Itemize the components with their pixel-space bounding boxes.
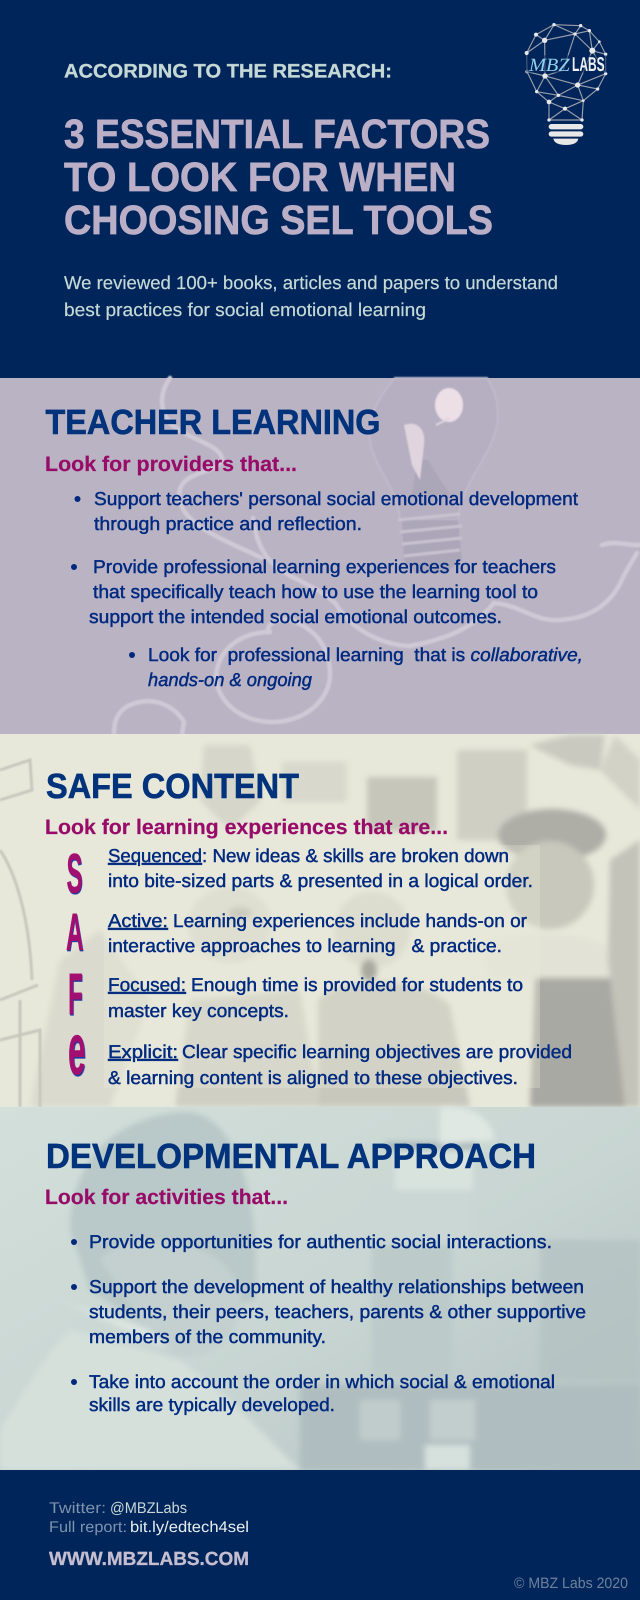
subheading: providers: Look for providers that... [45, 453, 297, 476]
icon: MBZ Labs light bulb logo [525, 23, 607, 145]
background photo: light bulb and chalk lines [0, 378, 640, 735]
acrostic letter S with sequenced text: : New ideas & skills are broken down [202, 845, 509, 866]
bullet: professional learning: support the intended social emotional outcomes. [89, 606, 502, 627]
acrostic letter A with active text: Learning experiences include hands-on or [173, 910, 527, 931]
title [64, 111, 493, 243]
acrostic letter S with sequenced text: S [66, 843, 83, 905]
bullet: professional learning [71, 556, 556, 627]
eyebrow heading: ACCORDING TO THE RESEARCH: [64, 60, 392, 82]
bullet: developmental order [71, 1371, 555, 1415]
acrostic letter A with active text [66, 903, 527, 962]
subheading: activities: Look for activities that... [45, 1186, 288, 1209]
sub-bullet: collaborative learning: Look for professional learning that is collaborative, [148, 644, 583, 665]
acrostic letter A with active text: A [66, 903, 83, 962]
copyright: © MBZ Labs 2020 [514, 1575, 628, 1592]
bullet: developmental order: skills are typically developed. [89, 1394, 335, 1415]
acrostic letter F with focused text: master key concepts. [108, 1000, 289, 1021]
acrostic letter e with explicit text [68, 1010, 572, 1090]
background photo: child stacking blocks [0, 1107, 640, 1470]
acrostic letter e with explicit text: & learning content is aligned to these objectives. [108, 1067, 518, 1088]
website: WWW.MBZLABS.COM [49, 1549, 249, 1570]
title: TO LOOK FOR WHEN [64, 154, 456, 200]
bullet: professional learning: that specifically teach how to use the learning tool to [93, 581, 538, 602]
acrostic letter e with explicit text: e [68, 1010, 86, 1091]
social links: Twitter: [49, 1500, 106, 1517]
panel: developmental approach [0, 1107, 640, 1470]
panel: safe content [0, 734, 640, 1107]
social links: bit.ly/edtech4sel [130, 1519, 249, 1536]
heading: safe content: SAFE CONTENT [46, 767, 299, 806]
acrostic letter F with focused text: Enough time is provided for students to [191, 974, 523, 995]
bullet: personal development [74, 488, 579, 534]
intro text: best practices for social emotional learning [64, 299, 426, 320]
panel: footer [0, 1470, 640, 1600]
title: 3 ESSENTIAL FACTORS [64, 111, 490, 157]
intro text [64, 272, 558, 320]
bullet: healthy relationships: members of the community. [89, 1326, 326, 1347]
acrostic letter S with sequenced text: Sequenced [108, 845, 202, 866]
icon: MBZ Labs light bulb logo: MBZ [529, 55, 570, 75]
background photo: children raising hands [0, 734, 640, 1107]
acrostic letter e with explicit text: Explicit: [108, 1041, 178, 1062]
sub-bullet: collaborative learning [129, 644, 583, 690]
bullet: healthy relationships: students, their peers, teachers, parents & other supportive [89, 1301, 586, 1322]
social links [49, 1500, 249, 1536]
bullet: professional learning: Provide professional learning experiences for teachers [93, 556, 556, 577]
bullet: social interactions: Provide opportunities for authentic social interactions. [89, 1231, 552, 1252]
acrostic letter S with sequenced text [66, 843, 533, 905]
acrostic letter A with active text: interactive approaches to learning & practice. [108, 935, 502, 956]
subheading: learning experiences: Look for learning experiences that are... [45, 816, 448, 839]
bullet: healthy relationships [71, 1276, 586, 1347]
icon: MBZ Labs light bulb logo: LABS [572, 53, 605, 75]
heading: developmental approach: DEVELOPMENTAL APPROACH [46, 1137, 536, 1176]
social links: Full report: [49, 1519, 127, 1536]
bullet: personal development: through practice and reflection. [94, 513, 362, 534]
bullet: personal development: Support teachers' personal social emotional development [94, 488, 579, 509]
sub-bullet: collaborative learning: hands-on & ongoing [148, 669, 313, 690]
acrostic letter F with focused text [68, 962, 523, 1027]
heading: teacher learning: TEACHER LEARNING [46, 403, 380, 442]
bullet: developmental order: Take into account the order in which social & emotional [89, 1371, 555, 1392]
acrostic letter A with active text: Active: [108, 910, 168, 931]
acrostic letter S with sequenced text: into bite-sized parts & presented in a logical order. [108, 870, 533, 891]
intro text: We reviewed 100+ books, articles and papers to understand [64, 272, 558, 293]
social links: @MBZLabs [110, 1500, 187, 1517]
acrostic letter F with focused text: F [68, 962, 83, 1027]
acrostic letter F with focused text: Focused: [108, 974, 186, 995]
panel: header [0, 0, 640, 378]
panel: teacher learning [0, 378, 640, 735]
title: CHOOSING SEL TOOLS [64, 197, 493, 243]
acrostic letter e with explicit text: Clear specific learning objectives are provided [182, 1041, 572, 1062]
bullet: healthy relationships: Support the development of healthy relationships between [89, 1276, 584, 1297]
